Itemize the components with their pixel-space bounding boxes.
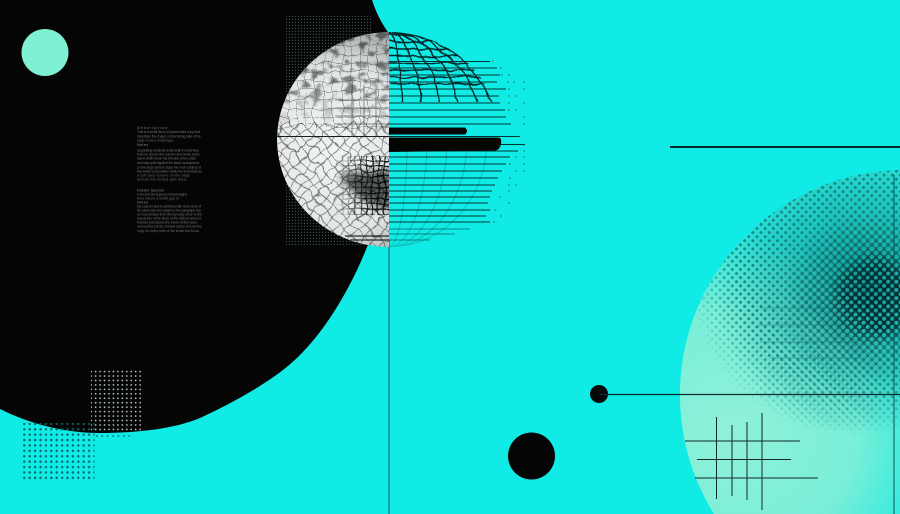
- block of small text: beside the dotted grid area.: [137, 177, 187, 181]
- block of small text: A second short group of lines begins: [137, 193, 187, 197]
- block of small text: copy on every side of the small text block.: [137, 229, 200, 233]
- block of small text: and stay quiet against the black background: [137, 161, 199, 165]
- sphere: dark grid near the centre of the left half: [336, 156, 389, 215]
- block of small text: the same size and weight so the paragraph has: [137, 208, 201, 212]
- block of small text: same width down the left side of the circle: [137, 156, 196, 160]
- black circle at bottom: [508, 432, 555, 480]
- sphere: dark band at the bottom edge: [345, 236, 390, 240]
- halftone: dark core with light holes: [828, 252, 900, 344]
- sphere: mesh right half: [389, 32, 504, 247]
- block of small text: the whole composition while the text reads as: [137, 169, 202, 173]
- block of small text: finishes just above the lower dotted area: [137, 220, 197, 224]
- block of small text: page in very small type.: [137, 138, 174, 142]
- block of small text: Notes: [137, 143, 148, 147]
- block of small text: Details Section: [137, 188, 164, 192]
- thin vertical centre line: [388, 240, 390, 514]
- halftone: diagonal hatching below the core: [758, 283, 894, 424]
- large mint halftone circle: [680, 170, 900, 514]
- halftone: dots layer: [698, 170, 900, 430]
- small mint circle: [22, 29, 68, 76]
- block of small text: [137, 126, 202, 233]
- white dot grid on black circle: [91, 370, 141, 432]
- block of small text: Notes: [137, 200, 148, 204]
- sphere: grey fine lines above the equator: [335, 85, 390, 136]
- large black circle: [0, 0, 389, 433]
- dot grid behind sphere: [286, 16, 372, 245]
- teal dot grid at lower left: [22, 423, 134, 482]
- sphere: black horizontal bars: [389, 128, 501, 152]
- block of small text: that run across the column and break at the: [137, 152, 200, 156]
- halftone: soft dark wash: [728, 170, 900, 424]
- block of small text: Description: [137, 126, 167, 130]
- block of small text: and leaves plenty of black space around the: [137, 225, 202, 229]
- block of small text: the column and it continues with more lines of: [137, 204, 201, 208]
- halftone: teal web around the core: [787, 214, 900, 375]
- block of small text: This is a small block of placeholder copy that: [137, 130, 200, 134]
- block of small text: here below a small gap in: [137, 197, 179, 201]
- connector dot with line: [590, 385, 900, 403]
- halftone: faint horizontal streaks: [758, 285, 890, 358]
- block of small text: a soft grey texture on the page: [137, 173, 190, 177]
- sphere: horizontal scan lines: [389, 62, 525, 240]
- sphere: solid textured left half: [277, 32, 389, 247]
- block of small text: an even texture from the top edge down to the: [137, 212, 202, 216]
- sphere: thin equator line: [277, 136, 389, 138]
- right thin vertical line: [893, 175, 895, 514]
- hash grid lines: [685, 413, 818, 510]
- block of small text: describes the shape on the facing side of the: [137, 134, 201, 138]
- sphere illustration: [277, 32, 525, 247]
- block of small text: lowest line of the block at the bottom where it: [137, 216, 201, 220]
- block of small text: so the large sphere stays the main subject of: [137, 165, 201, 169]
- block of small text: Supporting words sit underneath in short lines: [137, 148, 199, 152]
- sphere: dark shading on lower left half: [340, 168, 392, 210]
- sphere: scattered dots at right edge: [493, 61, 524, 222]
- right black horizontal rule: [670, 146, 900, 148]
